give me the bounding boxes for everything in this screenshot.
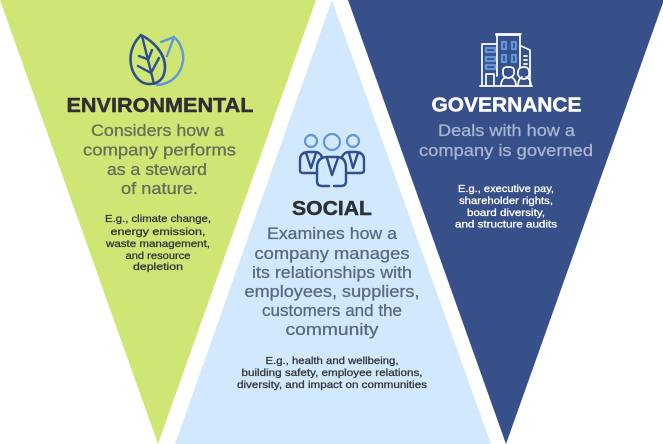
- text: governance description: Deals with how a: [438, 121, 576, 140]
- text: social examples: [237, 355, 427, 391]
- panel: governance triangle: [348, 0, 663, 444]
- text: environmental examples: waste management,: [105, 238, 210, 250]
- text: social description: community: [286, 320, 379, 339]
- text: governance examples: E.g., executive pay,: [458, 183, 554, 195]
- text: environmental description: Considers how a: [91, 121, 225, 140]
- text: governance description: [419, 121, 593, 160]
- text: social examples: E.g., health and wellbeing,: [266, 355, 398, 367]
- panel: environmental triangle: [0, 0, 316, 444]
- text: environmental description: as a steward: [107, 160, 207, 179]
- text: environmental description: of nature.: [121, 179, 198, 198]
- text: governance examples: board diversity,: [467, 207, 545, 219]
- text: governance examples: [455, 183, 557, 230]
- heading: social: SOCIAL: [292, 197, 372, 220]
- text: environmental examples: [105, 213, 211, 273]
- text: social description: its relationships with: [252, 263, 412, 282]
- text: environmental description: company performs: [83, 140, 236, 160]
- text: social description: [244, 224, 420, 339]
- text: social description: Examines how a: [267, 224, 398, 243]
- icon: leaves: [131, 35, 183, 85]
- text: governance description: company is governed: [419, 141, 593, 160]
- text: social description: employees, suppliers,: [244, 282, 420, 301]
- text: environmental examples: and resource: [126, 250, 191, 262]
- text: social description: company manages: [254, 244, 410, 263]
- text: environmental examples: depletion: [133, 261, 183, 273]
- heading: governance: GOVERNANCE: [432, 94, 582, 116]
- icon: office buildings and people: [480, 34, 532, 86]
- text: governance examples: and structure audits: [455, 218, 557, 230]
- text: social examples: diversity, and impact on communities: [237, 379, 427, 391]
- text: environmental examples: E.g., climate change,: [105, 213, 211, 225]
- heading: environmental: ENVIRONMENTAL: [66, 94, 254, 117]
- text: environmental description: [83, 121, 236, 198]
- text: environmental examples: energy emission,: [110, 226, 206, 238]
- text: governance examples: shareholder rights,: [459, 195, 553, 207]
- text: social examples: building safety, employee relations,: [242, 367, 422, 379]
- text: social description: customers and the: [262, 301, 402, 320]
- icon: business people: [300, 134, 364, 186]
- panel: social triangle: [175, 0, 491, 444]
